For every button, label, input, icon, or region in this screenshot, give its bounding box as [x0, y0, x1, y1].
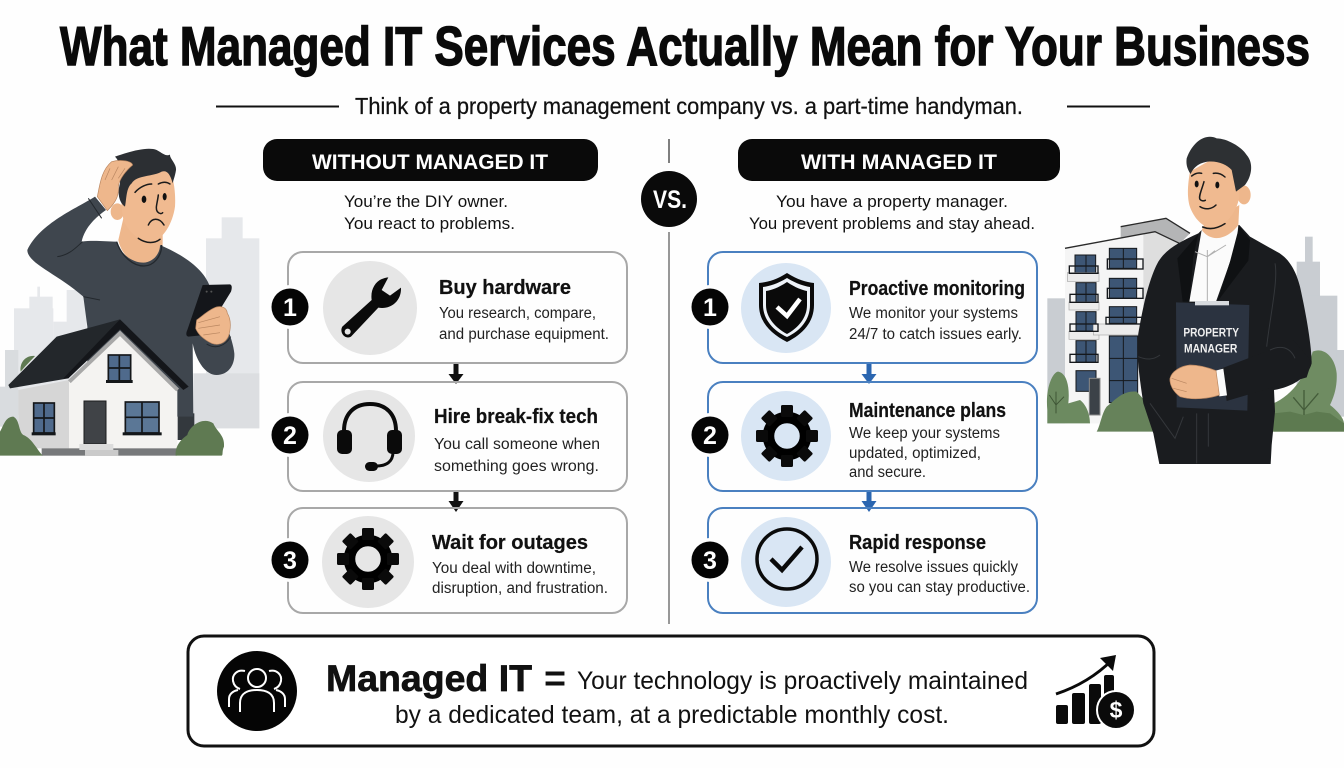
bushes: [0, 417, 43, 456]
neck: [118, 218, 163, 265]
icon: wrench: [341, 277, 401, 337]
tree right of man: [1270, 350, 1344, 432]
left step 1 card: [268, 252, 627, 363]
panel: bottom summary: [188, 636, 1154, 746]
right step 3 card: [688, 508, 1037, 613]
right intro text: You prevent problems and stay ahead.: [749, 214, 1035, 233]
hand: [1170, 365, 1219, 399]
hair: [1186, 137, 1251, 192]
right step 3 card: We resolve issues quickly: [849, 559, 1018, 576]
man in suit: [1137, 137, 1312, 464]
clipboard and hand: MANAGER: [1184, 341, 1238, 355]
sweater: [27, 197, 234, 417]
face features: [1195, 181, 1199, 187]
ear: [111, 203, 124, 220]
pants: [178, 413, 194, 440]
right step 1 card: 24/7 to catch issues early.: [849, 326, 1022, 343]
right step 2 card: 2: [703, 422, 717, 450]
vs divider: [641, 139, 697, 624]
left step 1 card: and purchase equipment.: [439, 326, 609, 343]
jacket: [1137, 225, 1312, 464]
left step 1 card: You research, compare,: [439, 305, 596, 322]
icon: gear: [337, 528, 399, 590]
right step 3 card: so you can stay productive.: [849, 579, 1030, 596]
left step 2 card: You call someone when: [434, 436, 600, 453]
trees: [1047, 372, 1090, 423]
right step 2 card: and secure.: [849, 464, 926, 481]
summary text: [326, 658, 1028, 729]
right step 1 card: Proactive monitoring: [849, 278, 1025, 300]
icon: shield check: [759, 273, 814, 342]
left step 2 card: [268, 382, 627, 491]
skyline background right: [1047, 237, 1344, 423]
lapels: [1177, 226, 1250, 302]
header pill: with managed IT: [738, 139, 1060, 181]
arrows between right cards: [862, 363, 876, 512]
panel: without managed IT steps: [268, 252, 627, 613]
face features: [142, 196, 146, 203]
header pill: with managed IT: WITH MANAGED IT: [801, 151, 997, 174]
house: [0, 319, 224, 456]
right step 1 card: [688, 252, 1037, 363]
raised hand: [97, 161, 133, 211]
left step 1 card: 1: [283, 294, 297, 322]
phone: [186, 284, 232, 337]
summary text: Your technology is proactively maintained: [577, 667, 1028, 695]
left intro text: [344, 192, 515, 233]
ear: [1237, 186, 1251, 204]
header pill: without managed IT: WITHOUT MANAGED IT: [312, 151, 548, 174]
left step 3 card: 3: [283, 547, 297, 575]
icon: check circle: [757, 529, 817, 589]
right step 2 card: updated, optimized,: [849, 445, 981, 462]
right step 3 card: 3: [703, 547, 717, 575]
door and steps: [84, 401, 106, 444]
subtitle with rules: Think of a property management company vs. a part-time handyman.: [355, 93, 1023, 119]
right step 2 card: Maintenance plans: [849, 400, 1006, 422]
left intro text: You react to problems.: [344, 214, 515, 233]
building windows: [1075, 248, 1138, 403]
house windows: [108, 355, 131, 381]
right step 1 card: 1: [703, 294, 717, 322]
right step 3 card: Rapid response: [849, 532, 986, 554]
icon: team: [217, 651, 297, 731]
face: [121, 168, 175, 242]
right step 2 card: [688, 382, 1037, 491]
summary text: by a dedicated team, at a predictable monthly cost.: [395, 701, 949, 729]
jacket seams: [1138, 263, 1276, 463]
illustration: worried DIY owner with house: [0, 149, 259, 456]
neck: [1202, 205, 1239, 238]
vs divider: VS.: [653, 186, 687, 214]
arrows between left cards: [448, 363, 464, 512]
illustration: property manager with building: [1047, 137, 1344, 464]
header pill: without managed IT: [263, 139, 598, 181]
left step 2 card: something goes wrong.: [434, 458, 599, 475]
left step 2 card: 2: [283, 422, 297, 450]
left step 2 card: Hire break-fix tech: [434, 406, 598, 428]
right intro text: [749, 192, 1035, 233]
left step 3 card: [268, 508, 627, 613]
left step 3 card: You deal with downtime,: [432, 560, 596, 577]
icon: growth chart with dollar: $: [1110, 697, 1123, 723]
man: [27, 149, 234, 440]
summary text: =: [544, 658, 566, 699]
right step 1 card: We monitor your systems: [849, 305, 1018, 322]
summary text: Managed IT: [326, 658, 532, 699]
cuff: [1216, 369, 1227, 396]
clipboard and hand: PROPERTY: [1183, 326, 1239, 340]
holding arm: [1222, 340, 1312, 401]
balconies: [1067, 273, 1142, 339]
right intro text: You have a property manager.: [776, 192, 1008, 211]
skyline background left: [0, 217, 259, 428]
left step 3 card: Wait for outages: [432, 532, 588, 554]
icon: gear: [756, 405, 818, 467]
panel: with managed IT steps: [688, 252, 1037, 613]
left step 3 card: disruption, and frustration.: [432, 580, 608, 597]
right step 2 card: We keep your systems: [849, 425, 1000, 442]
phone hand: [196, 307, 230, 344]
face: [1188, 157, 1239, 228]
left step 1 card: Buy hardware: [439, 277, 571, 299]
icon: headset: [337, 404, 402, 471]
shirt: [1189, 225, 1238, 302]
hair: [115, 149, 176, 207]
left intro text: You’re the DIY owner.: [344, 192, 508, 211]
icon: growth chart with dollar: [1056, 655, 1135, 729]
clipboard and hand: [1170, 301, 1312, 411]
apartment building: [1047, 218, 1190, 432]
